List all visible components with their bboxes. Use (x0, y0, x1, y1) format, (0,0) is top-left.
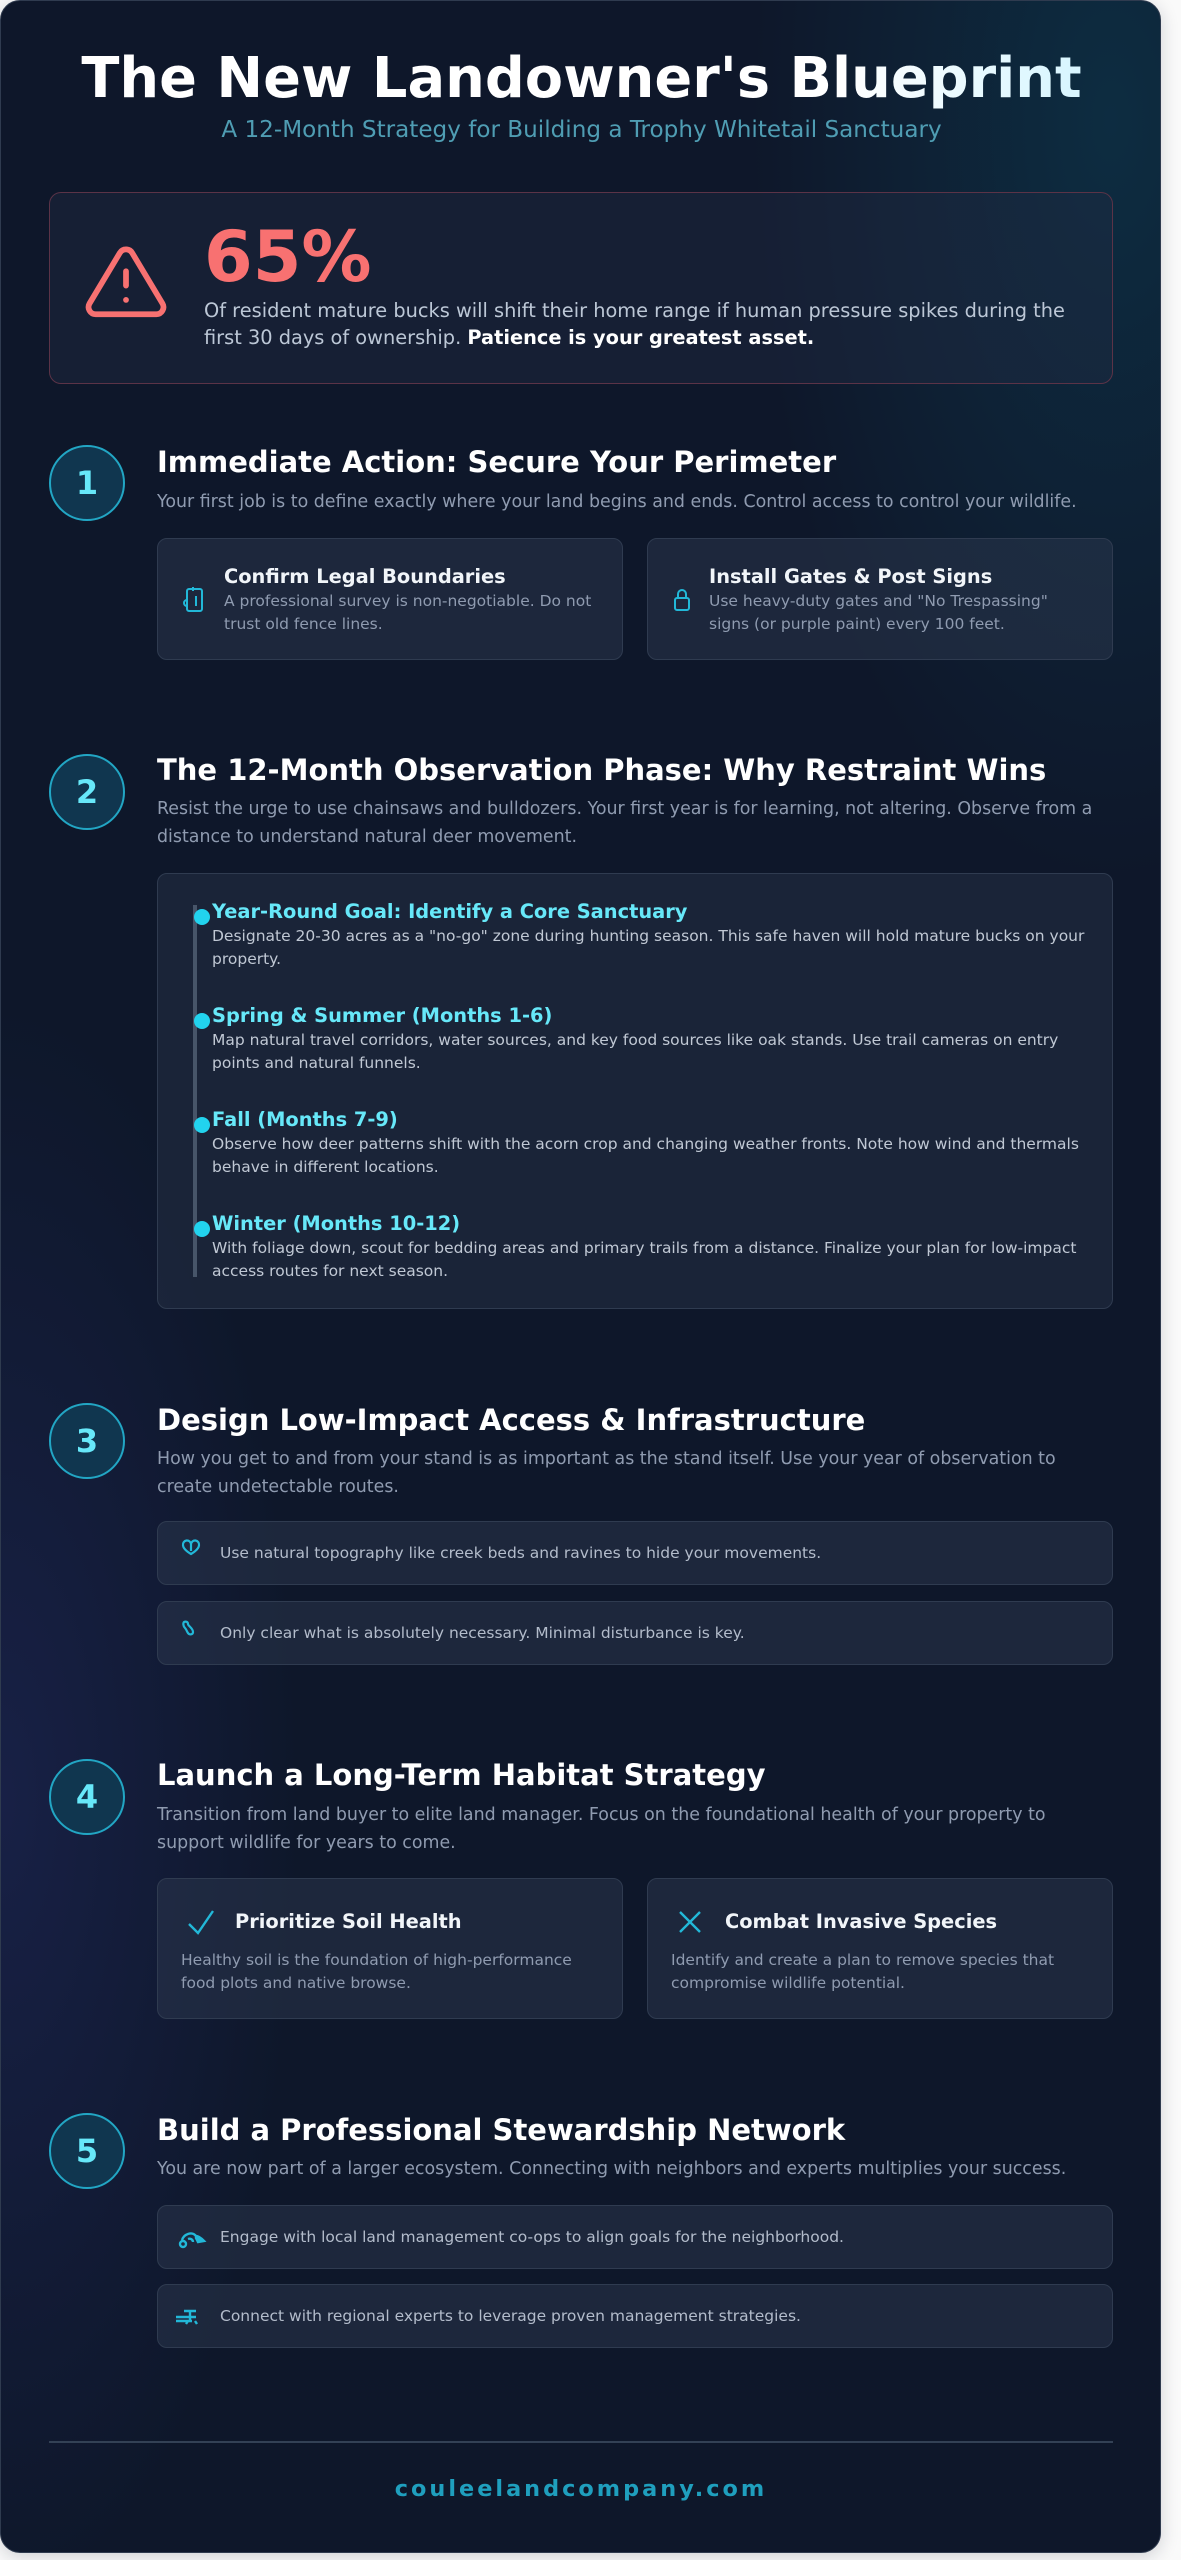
item text: points and natural funnels. (212, 1054, 421, 1072)
icon: footprint (182, 1620, 194, 1636)
card title: Prioritize Soil Health (235, 1910, 462, 1933)
heading: Design Low-Impact Access & Infrastructure (157, 1403, 865, 1437)
section 4 (49, 1758, 1113, 2019)
alert text: Of resident mature bucks will shift their home range if human pressure spikes during the (204, 299, 1065, 322)
card text: Healthy soil is the foundation of high-performance (181, 1951, 572, 1969)
timeline item: fall (194, 1108, 1079, 1176)
item text (212, 927, 1084, 968)
card text (181, 1951, 572, 1992)
card text (671, 1951, 1054, 1992)
card: soil health (157, 1878, 623, 2019)
description: create undetectable routes. (157, 1477, 399, 1497)
card: legal boundaries (157, 538, 623, 660)
heading: Immediate Action: Secure Your Perimeter (157, 445, 836, 479)
row text: Engage with local land management co-ops to align goals for the neighborhood. (220, 2228, 844, 2246)
icon: heart shape (182, 1539, 200, 1556)
heading: The 12-Month Observation Phase: Why Restraint Wins (157, 753, 1046, 787)
timeline item: spring and summer (194, 1004, 1058, 1072)
section 5 (49, 2113, 1113, 2348)
card text: signs (or purple paint) every 100 feet. (709, 615, 1005, 633)
step number 1 (49, 445, 125, 521)
icon: warning triangle (86, 246, 166, 318)
marker (194, 1013, 210, 1029)
step number 4: 4 (76, 1778, 98, 1816)
card title: Confirm Legal Boundaries (224, 565, 506, 588)
subtitle: A 12-Month Strategy for Building a Trophy Whitetail Sanctuary (221, 117, 942, 143)
alert text (204, 299, 1065, 349)
item text (212, 1239, 1076, 1280)
item text: Map natural travel corridors, water sources, and key food sources like oak stands. Use trail cameras on entry (212, 1031, 1058, 1049)
item text: access routes for next season. (212, 1262, 448, 1280)
item text (212, 1135, 1079, 1176)
section 3 (49, 1403, 1113, 1665)
icon: document (183, 587, 203, 612)
panel: timeline (157, 873, 1113, 1309)
card text: Identify and create a plan to remove species that (671, 1951, 1054, 1969)
description (157, 799, 1092, 847)
timeline item: winter (194, 1212, 1076, 1280)
step number 1: 1 (76, 464, 98, 502)
card text: trust old fence lines. (224, 615, 383, 633)
item title: Spring & Summer (Months 1-6) (212, 1004, 552, 1027)
row text: Only clear what is absolutely necessary. Minimal disturbance is key. (220, 1624, 745, 1642)
icon: network cloud (178, 2232, 206, 2248)
icon: speed lines (176, 2310, 198, 2324)
item text: behave in different locations. (212, 1158, 439, 1176)
timeline line (193, 905, 197, 1277)
section 2 (49, 753, 1113, 1309)
card text (224, 592, 591, 633)
timeline item: year-round (194, 900, 1084, 968)
card text: food plots and native browse. (181, 1974, 411, 1992)
marker (194, 1221, 210, 1237)
item text: Observe how deer patterns shift with the acorn crop and changing weather fronts. Note how wind and thermals (212, 1135, 1079, 1153)
item text: Designate 20-30 acres as a "no-go" zone during hunting season. This safe haven will hold mature bucks on your (212, 927, 1084, 945)
description: support wildlife for years to come. (157, 1833, 456, 1853)
title: The New Landowner's Blueprint (81, 46, 1082, 111)
section 1 (49, 445, 1113, 660)
item text (212, 1031, 1058, 1072)
card: gates and signs (647, 538, 1113, 660)
step number 2: 2 (76, 773, 98, 811)
item title: Fall (Months 7-9) (212, 1108, 398, 1131)
marker (194, 909, 210, 925)
card title: Combat Invasive Species (725, 1910, 997, 1933)
marker (194, 1117, 210, 1133)
step number 3 (49, 1403, 125, 1479)
heading: Launch a Long-Term Habitat Strategy (157, 1758, 765, 1792)
step number 5: 5 (76, 2132, 98, 2170)
step number 2 (49, 754, 125, 830)
row: co-ops (157, 2205, 1113, 2269)
row text: Connect with regional experts to leverage proven management strategies. (220, 2307, 801, 2325)
card title: Install Gates & Post Signs (709, 565, 992, 588)
heading: Build a Professional Stewardship Network (157, 2113, 845, 2147)
step number 4 (49, 1759, 125, 1835)
card text: Use heavy-duty gates and "No Trespassing" (709, 592, 1048, 610)
icon: cross mark (679, 1911, 701, 1933)
description: Your first job is to define exactly where your land begins and ends. Control access to control your wildlife. (157, 492, 1077, 512)
row: regional experts (157, 2284, 1113, 2348)
step number 3: 3 (76, 1422, 98, 1460)
icon: padlock (674, 589, 690, 611)
item text: property. (212, 950, 281, 968)
item title: Winter (Months 10-12) (212, 1212, 460, 1235)
row: minimal clearing (157, 1601, 1113, 1665)
item text: With foliage down, scout for bedding areas and primary trails from a distance. Finalize your plan for low-impact (212, 1239, 1076, 1257)
step number 5 (49, 2113, 125, 2189)
statistic: 65% (204, 216, 372, 298)
footer url: couleelandcompany.com (395, 2476, 767, 2502)
card text: compromise wildlife potential. (671, 1974, 905, 1992)
alert text: first 30 days of ownership. Patience is your greatest asset. (204, 326, 814, 349)
description: Transition from land buyer to elite land manager. Focus on the foundational health of your property to (157, 1805, 1046, 1825)
card: invasive species (647, 1878, 1113, 2019)
card text: A professional survey is non-negotiable. Do not (224, 592, 591, 610)
description (157, 1449, 1056, 1497)
item title: Year-Round Goal: Identify a Core Sanctuary (212, 900, 687, 923)
icon: check mark (188, 1910, 214, 1935)
panel: 65% alert (49, 192, 1113, 384)
description: How you get to and from your stand is as important as the stand itself. Use your year of observation to (157, 1449, 1056, 1469)
row: topography (157, 1521, 1113, 1585)
card text (709, 592, 1048, 633)
description: Resist the urge to use chainsaws and bulldozers. Your first year is for learning, not altering. Observe from a (157, 799, 1092, 819)
description: distance to understand natural deer movement. (157, 827, 577, 847)
description (156, 1805, 1046, 1853)
description: You are now part of a larger ecosystem. Connecting with neighbors and experts multiplies your success. (157, 2159, 1066, 2179)
row text: Use natural topography like creek beds and ravines to hide your movements. (220, 1544, 821, 1562)
footer (49, 2441, 1113, 2533)
